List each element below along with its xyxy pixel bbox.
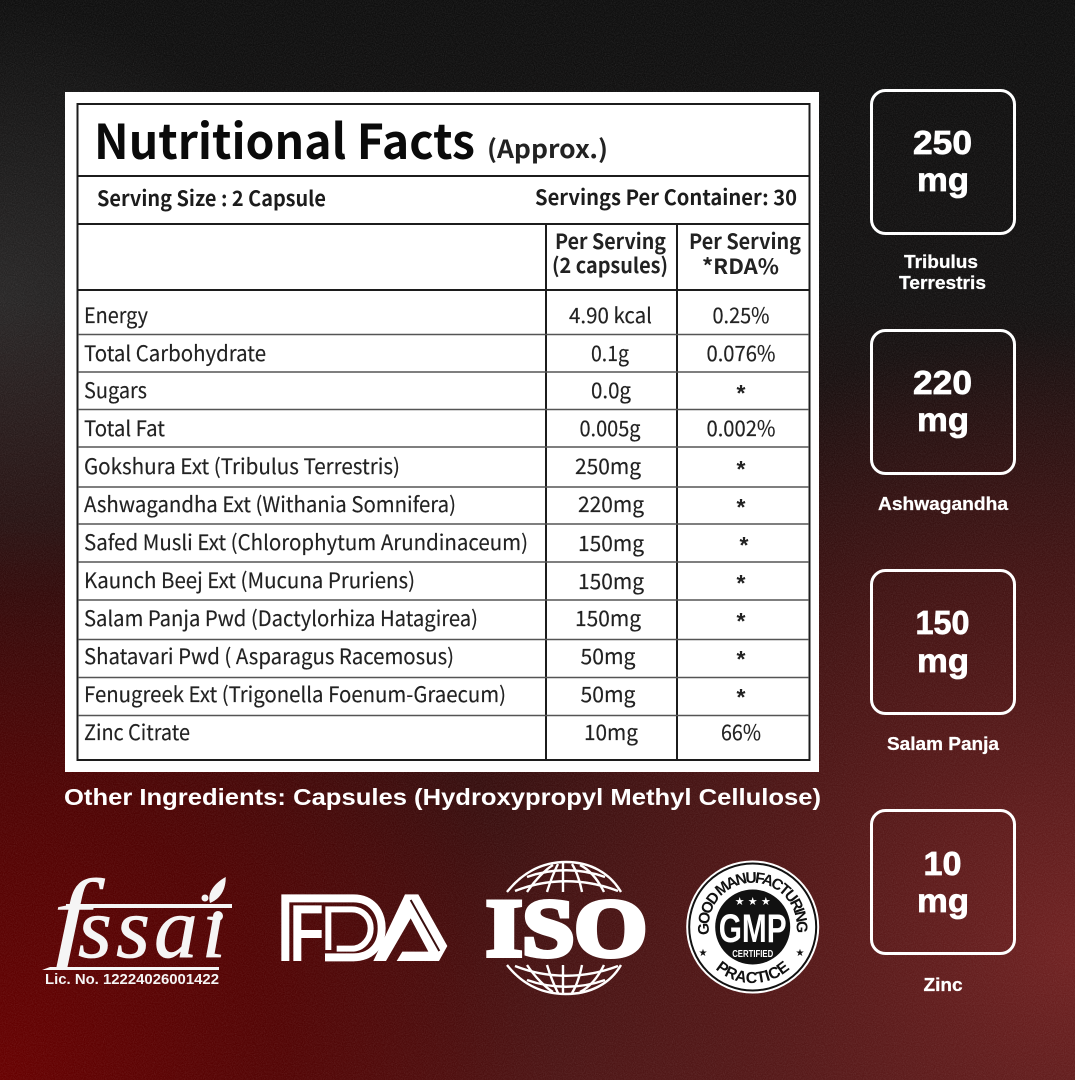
column headers xyxy=(552,226,801,281)
per serving values: 220mg xyxy=(578,489,644,519)
table row labels: Total Carbohydrate xyxy=(84,338,266,368)
callout: tribulus 250 mg: Tribulus xyxy=(904,252,978,272)
rda values: * xyxy=(737,456,746,482)
column headers: (2 capsules) xyxy=(552,250,668,280)
serving info: Serving Size : 2 Capsule xyxy=(97,183,326,213)
logo: fssai: ssaı xyxy=(78,879,226,976)
logo: GMP badge: ★★★ xyxy=(735,896,771,908)
rda values: 66% xyxy=(721,717,761,747)
table row labels: Kaunch Beej Ext (Mucuna Pruriens) xyxy=(84,565,415,595)
rda values: 0.25% xyxy=(712,300,770,330)
panel: nutritional facts table xyxy=(65,92,819,772)
callout: ashwagandha 220 mg: mg xyxy=(917,401,969,438)
column headers: Per Serving xyxy=(555,226,666,256)
rda values: * xyxy=(737,494,746,520)
logo: GMP badge: GOOD MANUFACTURING xyxy=(698,872,808,934)
column headers: *RDA% xyxy=(702,251,779,281)
callout: ashwagandha 220 mg xyxy=(872,330,1014,514)
table row labels: Total Fat xyxy=(84,413,165,443)
table row labels xyxy=(84,300,528,747)
callout: ashwagandha 220 mg: 220 xyxy=(913,364,972,401)
logo: GMP badge: PRACTICE xyxy=(716,960,790,984)
logo: GMP badge: ★ xyxy=(699,948,708,959)
callout: tribulus 250 mg: Terrestris xyxy=(899,273,986,293)
title: (Approx.) xyxy=(487,130,608,166)
rda values: * xyxy=(737,608,746,634)
per serving values: 150mg xyxy=(578,566,644,596)
logo: GMP badge: ★ xyxy=(796,948,805,959)
per serving values: 150mg xyxy=(575,603,641,633)
rda values: * xyxy=(737,684,746,710)
serving info xyxy=(97,182,797,213)
per serving values: 0.1g xyxy=(591,338,629,368)
callout: ashwagandha 220 mg: Ashwagandha xyxy=(878,494,1009,514)
callout: zinc 10 mg: mg xyxy=(917,882,969,919)
logo: FDA xyxy=(285,894,447,961)
callout: zinc 10 mg: Zinc xyxy=(924,975,962,995)
per serving values: 150mg xyxy=(578,528,644,558)
callout: salam panja 150 mg: Salam Panja xyxy=(887,734,1000,754)
rda values: 0.076% xyxy=(706,338,776,368)
per serving values: 50mg xyxy=(580,641,636,671)
logo: GMP badge: GMP xyxy=(719,907,787,951)
logo: fssai: Lic. No. 12224026001422 xyxy=(45,972,219,988)
rda values: * xyxy=(737,380,746,406)
table row labels: Salam Panja Pwd (Dactylorhiza Hatagirea) xyxy=(84,603,478,633)
other ingredients text: Other Ingredients: Capsules (Hydroxypropyl Methyl Cellulose) xyxy=(64,784,821,810)
per serving values: 0.0g xyxy=(591,375,631,405)
callout: tribulus 250 mg: 250 xyxy=(913,124,972,161)
per serving values: 0.005g xyxy=(580,413,641,443)
callout: zinc 10 mg xyxy=(872,810,1014,995)
per serving values: 10mg xyxy=(584,717,638,747)
table row labels: Energy xyxy=(84,300,148,330)
callout: tribulus 250 mg xyxy=(872,90,1014,293)
per serving values: 50mg xyxy=(580,679,636,709)
rda values: * xyxy=(737,646,746,672)
rda values: 0.002% xyxy=(706,413,776,443)
serving info: Servings Per Container: 30 xyxy=(535,182,797,212)
logo: fssai: f xyxy=(52,857,106,981)
table row labels: Fenugreek Ext (Trigonella Foenum-Graecum) xyxy=(84,679,506,709)
per serving values: 250mg xyxy=(575,451,641,481)
title: Nutritional Facts xyxy=(94,103,475,173)
callout: salam panja 150 mg xyxy=(872,570,1014,754)
logo: ISO: ISO xyxy=(486,882,647,974)
callout: tribulus 250 mg: mg xyxy=(917,161,969,198)
callout: salam panja 150 mg: 150 xyxy=(916,604,970,641)
per serving values xyxy=(569,300,652,747)
table row labels: Ashwagandha Ext (Withania Somnifera) xyxy=(84,489,456,519)
rda values: * xyxy=(737,570,746,596)
rda values xyxy=(706,300,776,747)
logo: GMP badge xyxy=(686,860,820,994)
logo: GMP badge: CERTIFIED xyxy=(732,949,773,960)
table row labels: Shatavari Pwd ( Asparagus Racemosus) xyxy=(84,641,454,671)
rda values: * xyxy=(740,532,749,558)
per serving values: 4.90 kcal xyxy=(569,300,652,330)
callout: zinc 10 mg: 10 xyxy=(924,845,962,882)
logo: ISO xyxy=(486,862,647,994)
table row labels: Gokshura Ext (Tribulus Terrestris) xyxy=(84,451,400,481)
table row labels: Sugars xyxy=(84,375,147,405)
table row labels: Zinc Citrate xyxy=(84,717,190,747)
callout: salam panja 150 mg: mg xyxy=(917,642,969,679)
column headers: Per Serving xyxy=(689,226,801,256)
table row labels: Safed Musli Ext (Chlorophytum Arundinaceum) xyxy=(84,527,528,557)
